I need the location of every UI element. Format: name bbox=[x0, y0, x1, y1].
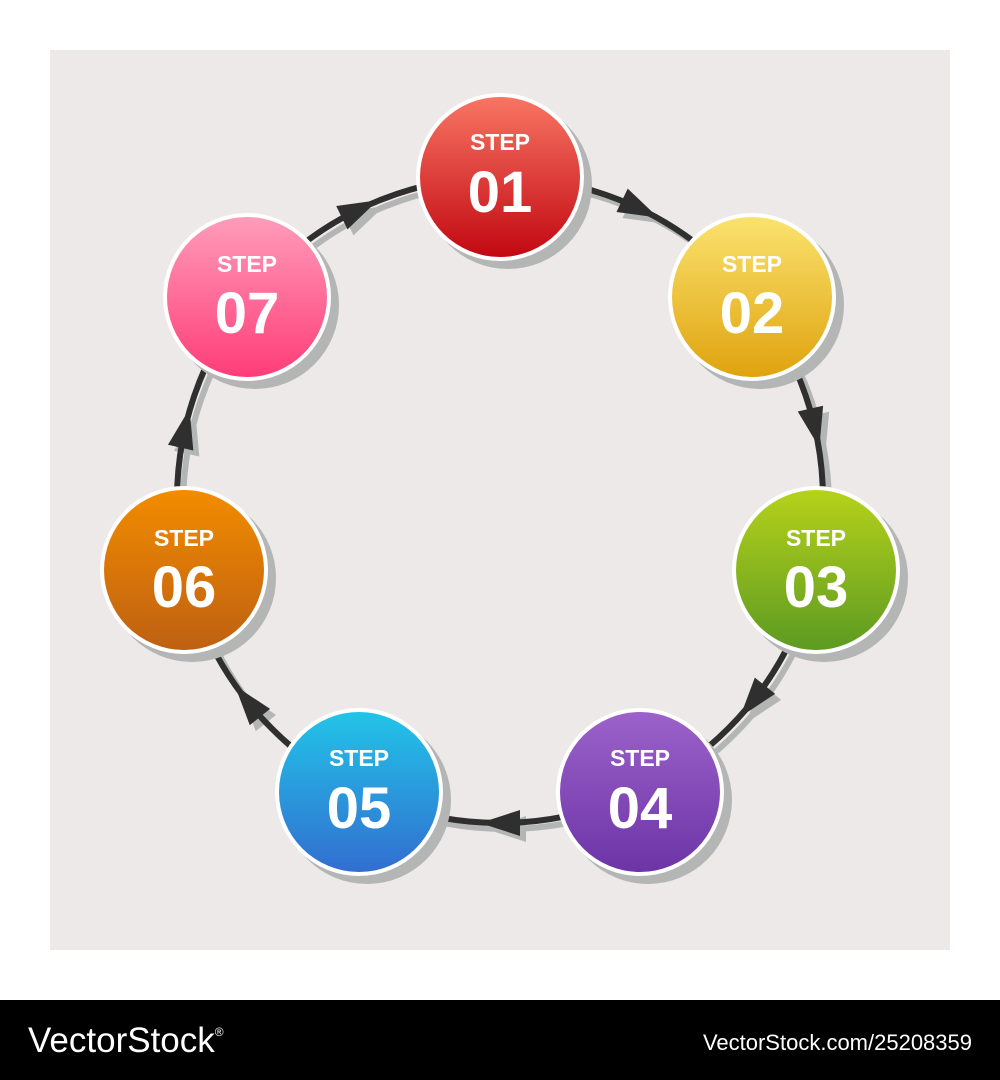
step 01: STEP bbox=[470, 129, 530, 155]
footer bar bbox=[0, 1000, 1000, 1080]
step 03: STEP bbox=[786, 525, 846, 551]
footer bar: VectorStock bbox=[28, 1021, 215, 1060]
step 01: 01 bbox=[468, 160, 532, 225]
background panel bbox=[50, 50, 950, 950]
step 04: 04 bbox=[608, 776, 672, 841]
step 04 bbox=[556, 708, 732, 884]
step 05: STEP bbox=[329, 745, 389, 771]
step 07 bbox=[163, 213, 339, 389]
footer bar: VectorStock.com/25208359 bbox=[703, 1030, 972, 1055]
step 03: 03 bbox=[784, 555, 848, 620]
step 06: 06 bbox=[152, 555, 216, 620]
step 06 bbox=[100, 486, 276, 662]
step 01 bbox=[416, 93, 592, 269]
step 05 bbox=[275, 708, 451, 884]
step 06: STEP bbox=[154, 525, 214, 551]
step 02 bbox=[668, 213, 844, 389]
step 03 bbox=[732, 486, 908, 662]
footer bar: ® bbox=[215, 1025, 224, 1039]
step 07: STEP bbox=[217, 251, 277, 277]
step 07: 07 bbox=[215, 281, 279, 346]
step 04: STEP bbox=[610, 745, 670, 771]
step 02: STEP bbox=[722, 251, 782, 277]
step 05: 05 bbox=[327, 776, 391, 841]
cycle arrows bbox=[168, 177, 838, 842]
step 02: 02 bbox=[720, 281, 784, 346]
